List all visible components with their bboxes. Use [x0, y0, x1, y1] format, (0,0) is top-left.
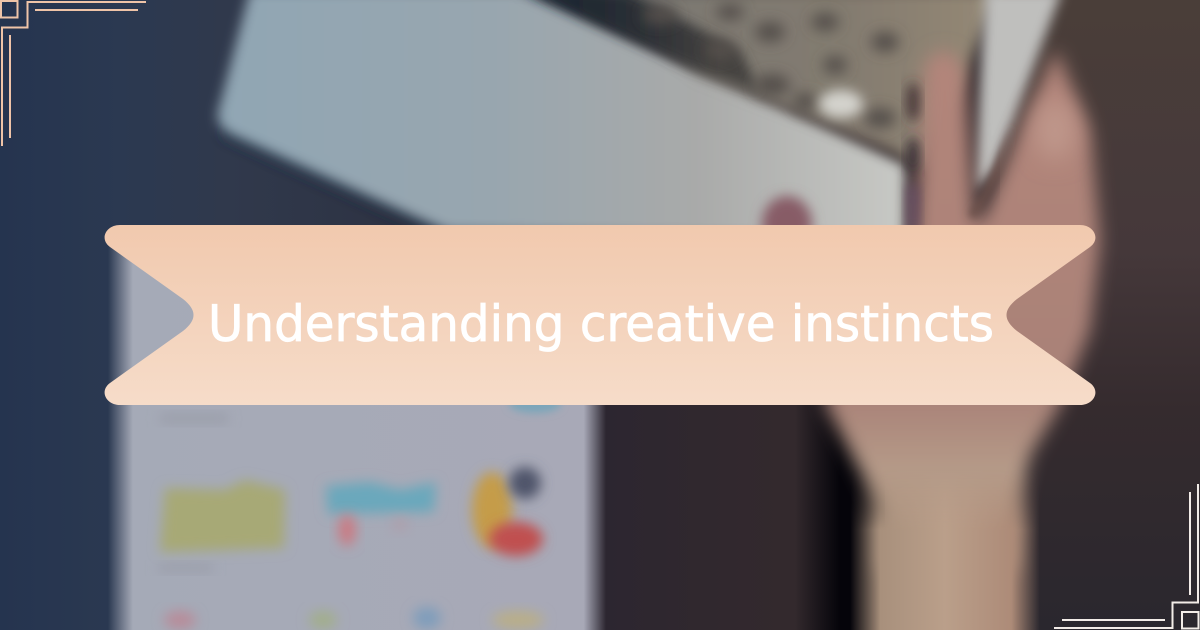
- corner ornament: bottom right: [1054, 484, 1198, 628]
- ribbon banner: [105, 225, 1095, 405]
- chart: yellow-green area: [160, 480, 285, 552]
- laptop right edge: [975, 0, 1062, 190]
- fingertip: [762, 196, 812, 252]
- finger shadow: [907, 82, 919, 230]
- chart: red marks: [338, 514, 356, 546]
- hand: [823, 50, 1100, 570]
- finger crease: [968, 125, 1012, 218]
- chart: blue bars: [326, 482, 436, 514]
- laptop edge shadow: [222, 105, 540, 240]
- arm: [850, 470, 1040, 630]
- title: Understanding creative instincts: [208, 295, 994, 353]
- laptop keyboard shadow: [520, 0, 760, 92]
- paper with charts: [108, 240, 606, 630]
- laptop keyboard: [590, 0, 1000, 170]
- highlighted key: [819, 90, 863, 118]
- pie chart: [472, 467, 543, 556]
- dark shadow beside arm: [795, 405, 885, 630]
- corner ornament: top left: [1, 1, 146, 146]
- laptop palm rest: [218, 0, 905, 240]
- hand highlight: [1035, 100, 1075, 160]
